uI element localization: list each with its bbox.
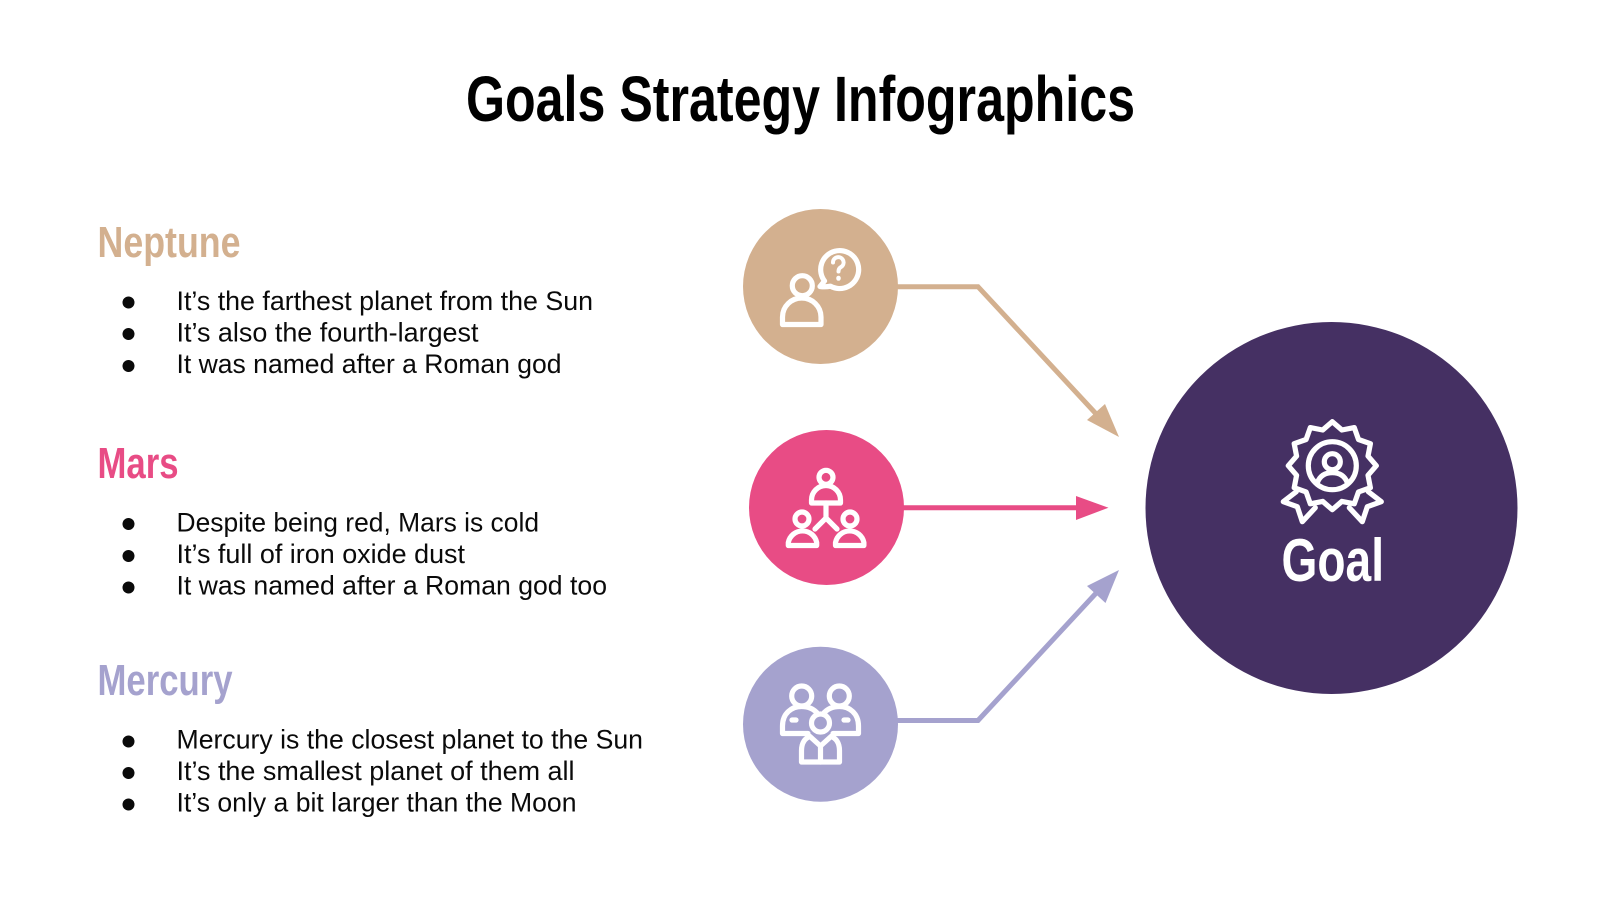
bullet list: Mercury: It’s the smallest planet of them all bbox=[176, 756, 574, 786]
bullet list: Mars bbox=[122, 508, 607, 600]
heading: Mercury: Mercury bbox=[98, 656, 233, 705]
icon: award rosette bbox=[1283, 422, 1381, 522]
bullet list: Neptune: It’s the farthest planet from the Sun bbox=[176, 286, 593, 316]
icon: person asking a question bbox=[782, 251, 859, 324]
bullet list: Mercury bbox=[122, 724, 643, 818]
heading: Mars: Mars bbox=[98, 439, 178, 488]
title: Goals Strategy Infographics bbox=[466, 63, 1135, 135]
panel: Mercury bbox=[98, 656, 643, 818]
arrow: Neptune to goal bbox=[890, 287, 1119, 437]
arrow: Mars to goal bbox=[895, 496, 1108, 520]
node: Mercury circle with icon bbox=[743, 647, 898, 802]
icon: group of three people bbox=[782, 686, 858, 762]
node: Neptune circle with icon bbox=[743, 209, 898, 364]
bullet list: Mercury: Mercury is the closest planet to the Sun bbox=[176, 724, 643, 754]
bullet list: Mercury: It’s only a bit larger than the Moon bbox=[176, 788, 576, 818]
bullet list: Mars: It’s full of iron oxide dust bbox=[176, 539, 465, 569]
panel: Neptune bbox=[98, 218, 593, 379]
arrow: Mercury to goal bbox=[890, 570, 1119, 720]
bullet list: Neptune: It was named after a Roman god bbox=[176, 349, 562, 379]
bullet list: Neptune: It’s also the fourth-largest bbox=[176, 318, 479, 348]
bullet list: Mars: It was named after a Roman god too bbox=[176, 570, 607, 600]
node: Mars circle with icon bbox=[749, 430, 904, 585]
node: goal circle bbox=[1146, 322, 1518, 694]
icon: team hierarchy bbox=[788, 470, 864, 546]
heading: Neptune: Neptune bbox=[98, 218, 240, 267]
bullet list: Mars: Despite being red, Mars is cold bbox=[176, 508, 539, 538]
bullet list: Neptune bbox=[122, 286, 593, 379]
label: Goal: Goal bbox=[1282, 527, 1384, 594]
panel: Mars bbox=[98, 439, 607, 600]
